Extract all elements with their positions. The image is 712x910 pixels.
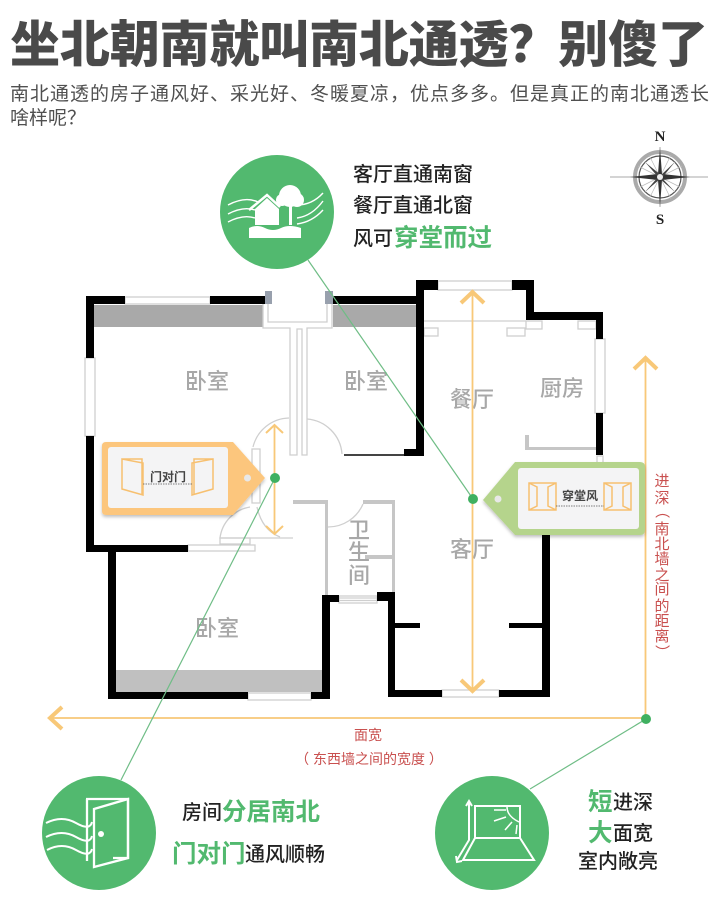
text: lower right: 大 (588, 819, 612, 847)
depth label: 离 (654, 628, 670, 645)
icon: house and wind (220, 155, 334, 269)
width label: 面宽 (354, 727, 382, 743)
callout: through draft (483, 462, 645, 535)
title: 坐北朝南就叫南北通透？别傻了 (10, 17, 708, 73)
text: lower left: 房间 (182, 801, 222, 824)
floor plan (85, 280, 605, 700)
green dots (270, 473, 651, 724)
text: lower right: 面宽 (613, 822, 653, 845)
thin grey structure (85, 281, 605, 700)
intro text: 啥样呢？ (10, 107, 86, 129)
orange measurement arrows (50, 292, 657, 729)
room labels: 卧室 (195, 616, 239, 641)
room labels: 间 (348, 563, 370, 588)
grey bands (94, 305, 263, 327)
depth label: 的 (654, 598, 670, 615)
black walls (86, 280, 603, 699)
depth label: （ (653, 503, 670, 519)
room labels (185, 369, 584, 641)
room labels: 卧室 (185, 369, 229, 394)
room labels: 客厅 (450, 537, 494, 562)
depth label: 间 (654, 581, 670, 598)
callout: door to door: 门对门 (150, 469, 186, 484)
text: top callout: 客厅直通南窗 (353, 163, 473, 186)
callout: door to door (102, 442, 265, 515)
text: lower left: 分居南北 (222, 798, 320, 826)
text: lower left (172, 798, 325, 868)
room labels: 生 (348, 540, 370, 565)
text: lower right: 室内敞亮 (578, 850, 658, 873)
text: lower right: 短 (588, 788, 612, 816)
depth label: 墙 (654, 551, 670, 568)
room labels: 卫 (348, 518, 370, 543)
pillars (265, 291, 272, 304)
icon: bright room (435, 776, 549, 890)
room labels: 餐厅 (450, 387, 494, 412)
depth label: 南 (654, 521, 670, 538)
icon: door and wind (42, 776, 156, 890)
depth label: 北 (654, 536, 670, 553)
callout: through draft: 穿堂风 (562, 488, 598, 503)
width label: （ 东西墙之间的宽度 ） (295, 751, 443, 767)
text: lower left: 通风顺畅 (245, 843, 325, 866)
intro text (10, 83, 709, 129)
icon: compass: N (655, 129, 666, 145)
depth label: ） (653, 644, 670, 660)
green leader lines (121, 260, 646, 789)
text: top callout: 餐厅直通北窗 (353, 194, 473, 217)
depth label (653, 473, 670, 660)
room labels: 厨房 (540, 376, 584, 401)
text: top callout (353, 163, 492, 252)
depth label: 深 (654, 490, 670, 507)
depth label: 距 (654, 613, 670, 630)
bathroom and kitchen grey walls (293, 435, 596, 595)
intro text: 南北通透的房子通风好、采光好、冬暖夏凉，优点多多。但是真正的南北通透长 (10, 83, 709, 105)
icon: compass: S (656, 212, 664, 228)
depth label: 进 (654, 473, 670, 490)
text: top callout: 穿堂而过 (394, 224, 492, 252)
width label (295, 727, 443, 767)
depth label: 之 (654, 567, 670, 584)
icon: compass (610, 129, 708, 228)
text: lower right: 进深 (613, 791, 653, 814)
text: top callout: 风可 (353, 228, 393, 250)
room labels: 卧室 (344, 369, 388, 394)
text: lower right (578, 788, 658, 873)
text: lower left: 门对门 (172, 840, 246, 868)
